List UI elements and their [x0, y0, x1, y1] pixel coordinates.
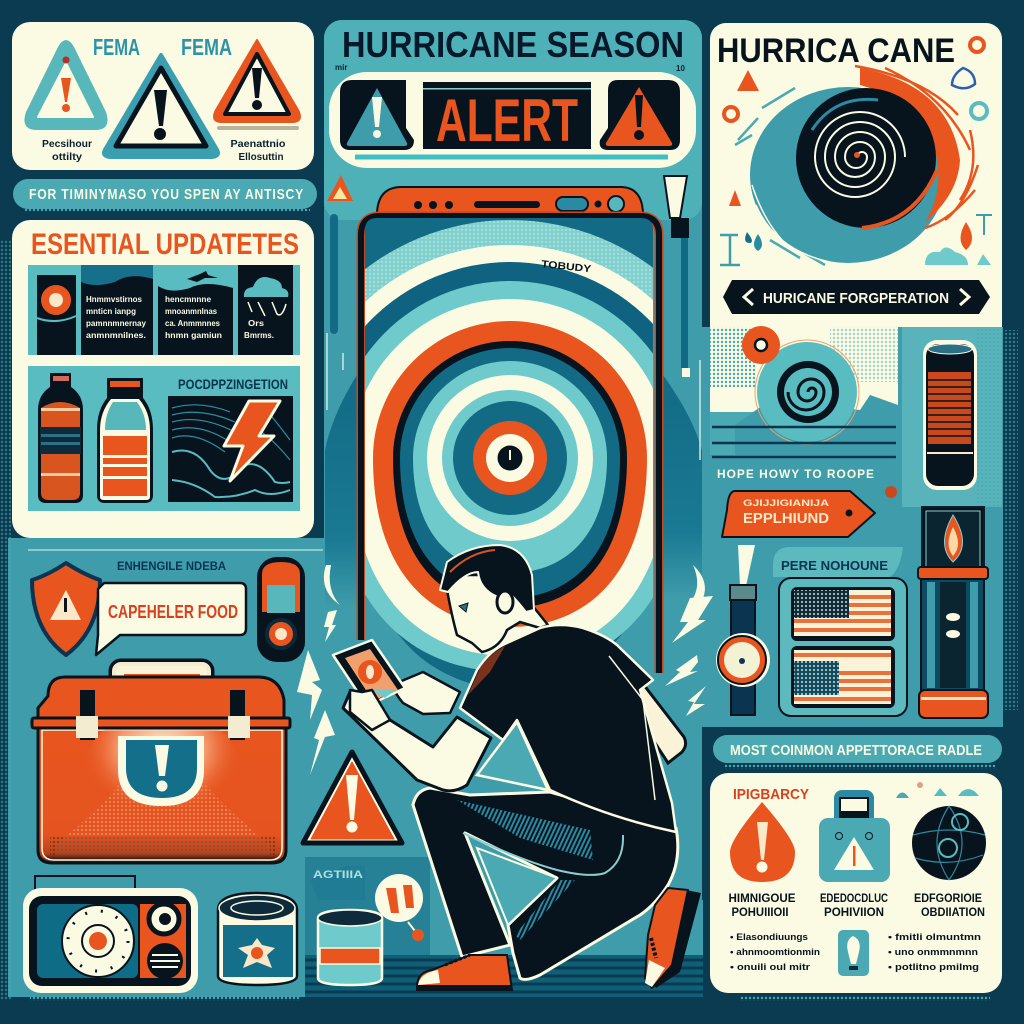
label: emergency needs: ENHENGILE NDEBA [117, 559, 226, 573]
icon: top flag [791, 587, 895, 641]
bullet list: right: • potlitno pmilmg [888, 962, 979, 972]
band: right lower [703, 727, 1003, 777]
icon: orange warning triangle [214, 40, 300, 130]
rear shoe [645, 888, 701, 988]
side decoration: center panel [324, 175, 705, 610]
phone with radar rings [356, 186, 664, 683]
icon: thermos lantern [918, 507, 988, 718]
person: crouching man with phone [333, 545, 701, 990]
section: supplies and lightning [28, 366, 300, 511]
icon: shield with warning [32, 563, 100, 655]
pants [413, 788, 678, 979]
strip: four update tiles: anmnmnilnes. [86, 330, 146, 340]
neck and face [447, 575, 548, 652]
bullet list: left: • Elasondiuungs [730, 932, 808, 942]
icon: orange emergency box [32, 663, 290, 863]
title: hurricane season: HURRICANE SEASON [342, 24, 684, 65]
caption: column 2: EDEDOCDLUC [820, 891, 888, 905]
label: action panel: AGTIIIA [313, 869, 363, 881]
lightning bolts [297, 596, 713, 775]
band: left advisory: FOR TIMINYMASO YOU SPEN AY ANTISCY [29, 186, 304, 203]
label: hope howy to rood: HOPE HOWY TO ROOPE [717, 467, 875, 481]
upper arm and finger hand [392, 672, 460, 714]
floor stripes [305, 955, 703, 997]
panel: center header [324, 20, 702, 220]
icon: pause bubble [375, 874, 424, 941]
icon: bottom flag [791, 646, 895, 708]
band: right lower: MOST COINMON APPETTORACE RADLE [730, 743, 982, 759]
icon: radio [23, 876, 198, 993]
icon: globe [912, 806, 986, 880]
tag: orange label: GJIJJIGIANIJA [743, 498, 830, 508]
banner: hurricane formation [723, 280, 990, 314]
bullet list: right: • fmitli olmuntmn [888, 932, 981, 942]
label: FEMA left: FEMA [93, 34, 140, 60]
caption: column 2 line 2: POHIVIION [824, 905, 884, 919]
panel: FEMA warning signs [12, 22, 314, 170]
phone frame [361, 216, 659, 673]
caption: column 3: EDFGORIOIE [914, 891, 982, 905]
icon: second can [318, 910, 382, 985]
triangle gap under torso [477, 722, 548, 790]
heading: emergency: IPIGBARCY [733, 786, 809, 803]
strip: four update tiles: pamnnmnernay [86, 318, 146, 328]
icon: left warning [340, 80, 414, 150]
caption: left sign second line: ottilty [52, 152, 82, 163]
phone in hand [333, 640, 405, 706]
icon: info tile [838, 930, 869, 976]
callout: capebeler food: CAPEHELER FOOD [108, 602, 238, 622]
icon: orange bottle [38, 373, 83, 503]
forearm holding phone [343, 692, 491, 791]
small label left: mir [335, 63, 347, 72]
strip: four update tiles: Hnmmvstirnos [86, 294, 142, 304]
caption: column 1: HIMNIGOUE [728, 891, 796, 905]
strip: four update tiles: hencmnnne [165, 294, 211, 304]
label: phone screen: TOBUDY [541, 259, 592, 275]
panel: flags [773, 547, 907, 716]
strip: four update tiles: ca. Anmmnnes [165, 318, 220, 328]
strip: four update tiles: Bmrms. [244, 330, 274, 340]
caption: column 1 line 2: POHUIIIOII [732, 905, 788, 919]
eye [459, 603, 468, 612]
icon: small clouds row [896, 782, 979, 798]
icon: right warning [600, 80, 680, 150]
bullet list: left: • ahnmoomtionmin [730, 947, 820, 957]
phone top bar [377, 187, 643, 213]
chart: hurricane spiral [735, 66, 978, 265]
radar rings [365, 218, 653, 683]
panel: storm scene [710, 326, 1002, 507]
small label right: 10 [676, 64, 685, 73]
t-shirt [460, 625, 676, 832]
banner: hurricane formation: HURICANE FORGPERATION [763, 290, 949, 307]
panel: left bottom supplies [23, 549, 430, 993]
label: flags heading: PERE NOHOUNE [781, 558, 888, 573]
alert word box: ALERT [436, 87, 578, 154]
caption: right sign second line: Ellosuttin [238, 152, 284, 163]
strip: four update tiles: Ors [248, 318, 264, 328]
label: action panel [305, 857, 430, 955]
strip: four update tiles: mnoanmnlnas [165, 306, 217, 316]
icon: battery [923, 340, 977, 490]
icon: lock with warning [819, 790, 890, 882]
tag: orange label: EPPLHIUND [743, 510, 829, 527]
icon: small storm glyphs [720, 38, 992, 265]
warning triangle on teal [303, 752, 402, 843]
front shoe [416, 955, 512, 990]
caption: left sign: Pecsihour [42, 139, 92, 150]
back arm [640, 680, 686, 763]
panel: emergency card [710, 773, 1002, 993]
phone frame inner [361, 216, 659, 673]
hatch on thigh [457, 800, 593, 860]
alert word box [423, 82, 591, 154]
icon: wristwatch [716, 545, 770, 715]
strip: four update tiles: hnmn gamiun [165, 330, 222, 340]
gap under thigh [477, 848, 557, 925]
chart: storm waves with lightning [168, 396, 293, 502]
caption: right sign: Paenattnio [230, 139, 286, 150]
bullet list: left: • onuili oul mitr [730, 962, 811, 972]
band: left advisory [13, 179, 317, 212]
hair [440, 545, 534, 613]
bullet list: right: • uno onmmnmnn [888, 947, 978, 957]
heading: essential updates: ESENTIAL UPDATETES [31, 228, 299, 261]
callout: capebeler food [96, 583, 246, 655]
bullet list: right [888, 932, 981, 972]
bottom edge halftone [30, 996, 990, 1001]
icon: teal warning triangle [24, 40, 108, 130]
alert banner [329, 72, 696, 168]
panel: hurricane card [710, 23, 1002, 327]
gripping hand [350, 690, 390, 730]
title: hurrica cane: HURRICA CANE [717, 32, 955, 70]
caption: column 3 line 2: OBDIIATION [921, 905, 985, 919]
label: FEMA right: FEMA [181, 34, 232, 60]
strip: four update tiles [28, 265, 300, 355]
label: preparation: POCDPPZINGETION [178, 376, 288, 392]
icon: water bottle [97, 378, 153, 503]
strip: four update tiles: mnticn ianpg [86, 306, 136, 316]
icon: orange drop [730, 802, 795, 882]
icon: black and blue warning triangle [104, 55, 218, 157]
thigh seam [463, 833, 623, 875]
icon: handheld device [257, 557, 305, 662]
hatch on calf [515, 880, 575, 940]
bullet list: left [730, 932, 820, 972]
icon: food can [218, 893, 297, 985]
tag: orange label [722, 486, 897, 537]
